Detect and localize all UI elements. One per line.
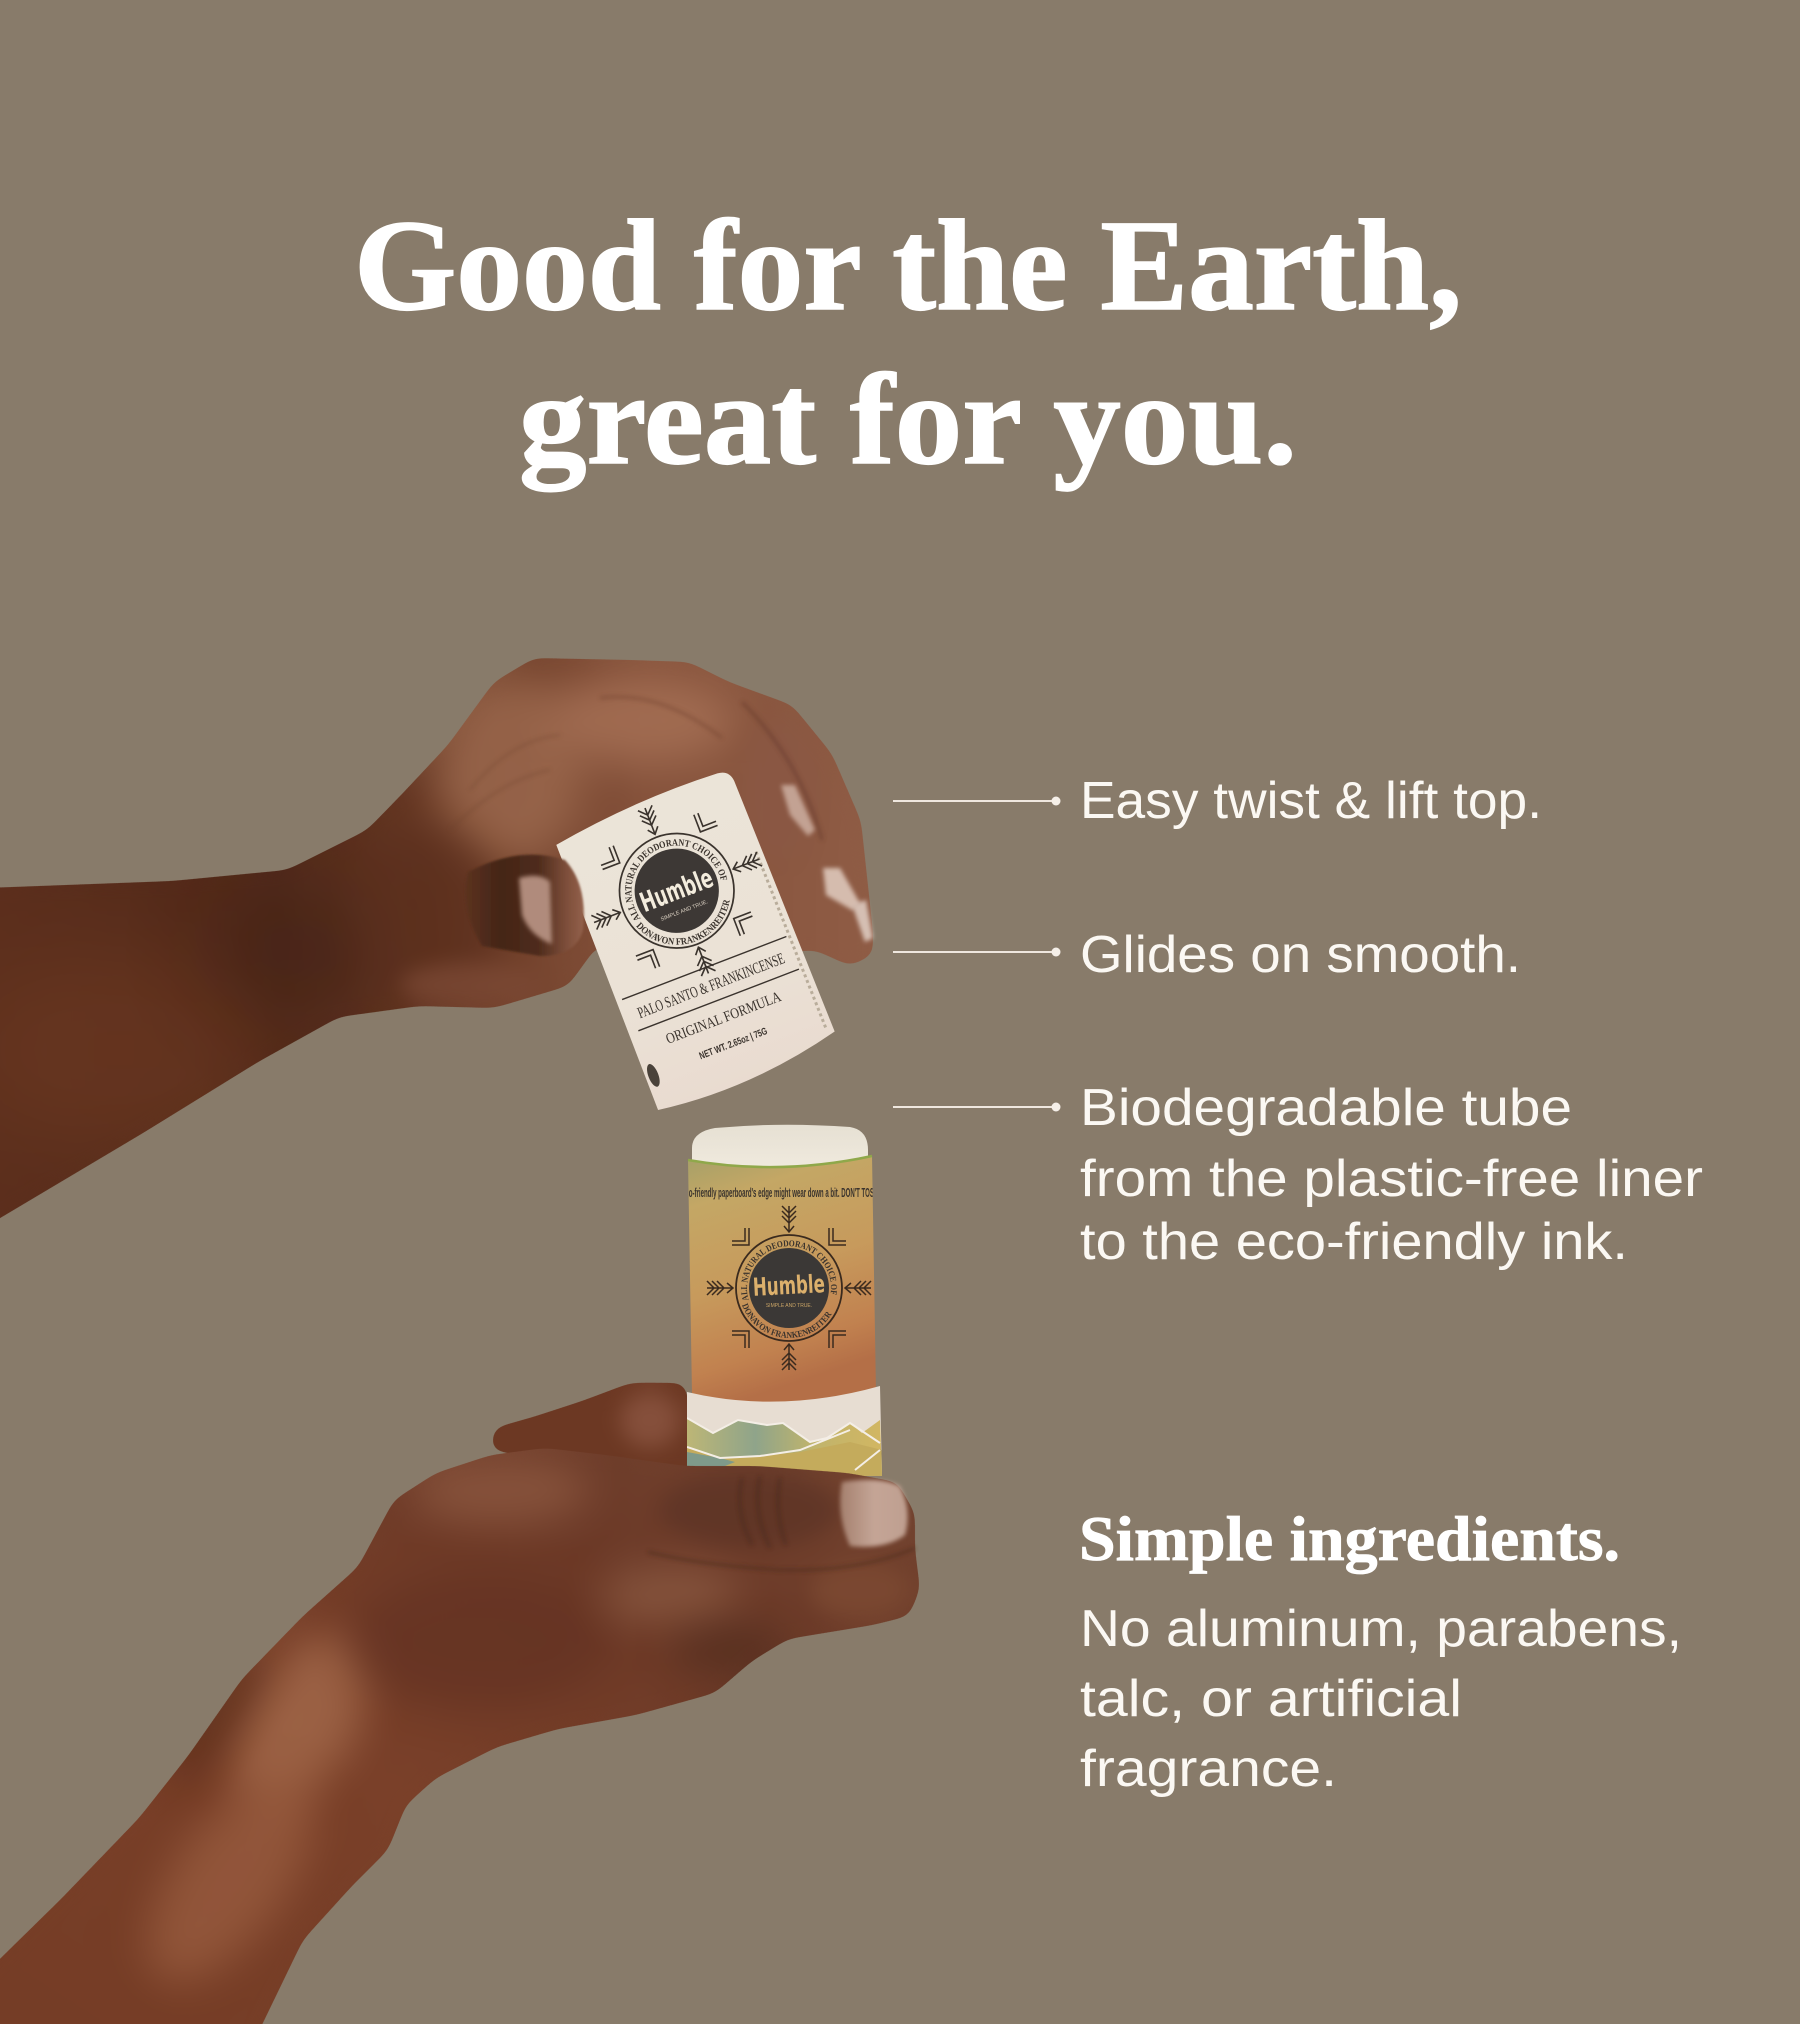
simple ingredients text block: No aluminum, parabens, (1080, 1600, 1682, 1658)
simple ingredients text block (1079, 1503, 1682, 1798)
callout: easy twist and lift top (893, 772, 1542, 830)
tube body (688, 1156, 876, 1403)
callout: biodegradable tube (893, 1079, 1703, 1271)
upper thumb and fingertips (465, 785, 873, 956)
cap product text: ORIGINAL FORMULA (664, 989, 784, 1048)
deodorant stick (687, 1124, 882, 1476)
upper hand holding cap (0, 658, 873, 1242)
cap body (553, 766, 840, 1115)
cap product text (622, 936, 818, 1081)
tube logo: Humble (752, 1269, 826, 1302)
thumb crease (648, 1548, 915, 1570)
cap logo: Humble (636, 863, 718, 919)
callout: glides on smooth: Glides on smooth. (1080, 926, 1521, 984)
cap right edge seam (756, 851, 826, 1029)
tube logo: ALL NATURAL DEODORANT CHOICE OF (741, 1240, 837, 1300)
fingers behind tube (491, 1383, 700, 1470)
cap logo: ALL NATURAL DEODORANT CHOICE OF (625, 839, 728, 920)
lower thumbnail (840, 1480, 908, 1547)
infographic canvas: eco-friendly paperboard's edge might wear down a bit. DON'T TOSS (682, 1185, 878, 1200)
callout: glides on smooth (893, 926, 1521, 984)
callout: biodegradable tube: Biodegradable tube (1080, 1079, 1572, 1137)
callout: easy twist and lift top: Easy twist & lift top. (1080, 772, 1542, 830)
simple ingredients text block: Simple ingredients. (1079, 1503, 1620, 1574)
cap logo (591, 805, 762, 976)
cap product text: PALO SANTO & FRANKINCENSE (635, 950, 787, 1022)
base ring with mountains (687, 1386, 882, 1476)
white deodorant top (692, 1125, 868, 1174)
simple ingredients text block: fragrance. (1080, 1740, 1337, 1798)
tube logo: DONAVON FRANKENREITER (742, 1302, 832, 1338)
lower hand holding tube (0, 1448, 920, 2024)
title: great for you. (519, 348, 1297, 492)
knuckle wrinkles (740, 1476, 786, 1548)
deodorant cap with label (556, 772, 835, 1110)
cap small badge (644, 1062, 662, 1088)
cap logo: SIMPLE AND TRUE. (660, 899, 709, 923)
title: Good for the Earth, (354, 194, 1462, 338)
tube logo (706, 1206, 872, 1370)
callout: biodegradable tube: from the plastic-free liner (1080, 1150, 1703, 1208)
tube logo: SIMPLE AND TRUE. (766, 1303, 812, 1309)
callout: biodegradable tube: to the eco-friendly ink. (1080, 1213, 1628, 1271)
cap product text: NET WT. 2.65oz | 75G (698, 1026, 769, 1062)
simple ingredients text block: talc, or artificial (1080, 1670, 1462, 1728)
cap logo: DONAVON FRANKENREITER (636, 900, 730, 945)
title (354, 194, 1462, 492)
